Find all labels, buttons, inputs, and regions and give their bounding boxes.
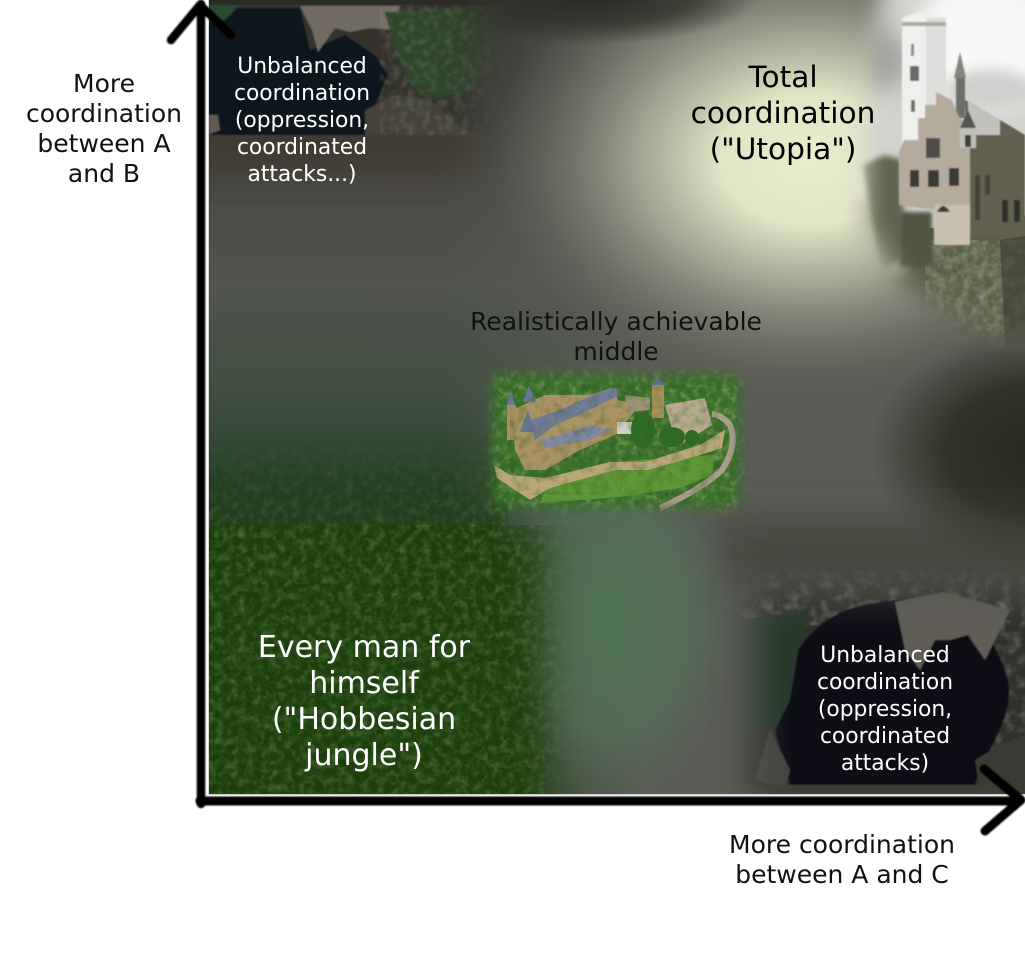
ramp and outer road — [660, 414, 733, 508]
cave bottom right — [736, 576, 1025, 794]
quadrant label: utopia: ("Utopia") — [710, 132, 856, 166]
quadrant label: bottom right — [817, 643, 953, 776]
left wall and trees — [845, 200, 905, 275]
background gradient — [208, 0, 1025, 810]
quadrant label: middle: middle — [573, 337, 659, 366]
arrow: vertical axis — [171, 4, 231, 804]
quadrant label: bottom right: attacks) — [841, 751, 929, 776]
y axis label: More — [73, 69, 135, 98]
quadrant label: top left: attacks...) — [247, 162, 357, 187]
quadrant label: jungle: jungle") — [305, 738, 423, 773]
quadrant label: bottom right: coordination — [817, 670, 953, 695]
spire — [954, 52, 966, 78]
x axis label — [729, 830, 955, 889]
quadrant label: top left: (oppression, — [235, 108, 369, 133]
y axis label: coordination — [26, 99, 182, 128]
quadrant label: jungle: ("Hobbesian — [272, 702, 456, 737]
quadrant label: top left: Unbalanced — [237, 54, 367, 79]
ramparts — [494, 430, 725, 500]
arrow: horizontal axis — [200, 769, 1021, 831]
quadrant label: middle — [470, 307, 762, 366]
quadrant label: utopia: coordination — [691, 96, 875, 130]
y axis label: between A — [37, 129, 171, 158]
towers and building — [512, 388, 640, 470]
quadrant label: jungle: Every man for — [258, 630, 470, 665]
quadrant label: top left: coordinated — [237, 135, 367, 160]
quadrant label: middle: Realistically achievable — [470, 307, 762, 336]
icon: utopia castle on cliff — [852, 0, 1025, 346]
tower — [901, 12, 926, 144]
right wing — [965, 100, 1025, 235]
quadrant label: bottom right: Unbalanced — [820, 643, 950, 668]
quadrant label: top left — [234, 54, 370, 187]
quadrant label: top left: coordination — [234, 81, 370, 106]
quadrant label: bottom right: (oppression, — [818, 697, 952, 722]
windows — [926, 138, 940, 158]
cliff — [886, 216, 1025, 334]
jungle bottom left — [209, 464, 569, 794]
icon: realistic middle castle — [486, 368, 746, 514]
quadrant label: jungle — [258, 630, 470, 773]
quadrant label: jungle: himself — [309, 666, 419, 701]
x axis label: More coordination — [729, 830, 955, 859]
y axis label — [26, 69, 182, 188]
stepped gable — [898, 92, 971, 210]
quadrant label: bottom right: coordinated — [820, 724, 950, 749]
small turret — [960, 110, 976, 128]
quadrant label: utopia — [691, 60, 875, 166]
chart: coordination plane background and axes — [166, 0, 1025, 836]
axis highlights — [205, 0, 1025, 796]
lawn — [540, 455, 715, 503]
x axis label: between A and C — [735, 860, 949, 889]
y axis label: and B — [68, 159, 140, 188]
cave top left — [209, 4, 488, 180]
quadrant label: utopia: Total — [748, 60, 818, 94]
